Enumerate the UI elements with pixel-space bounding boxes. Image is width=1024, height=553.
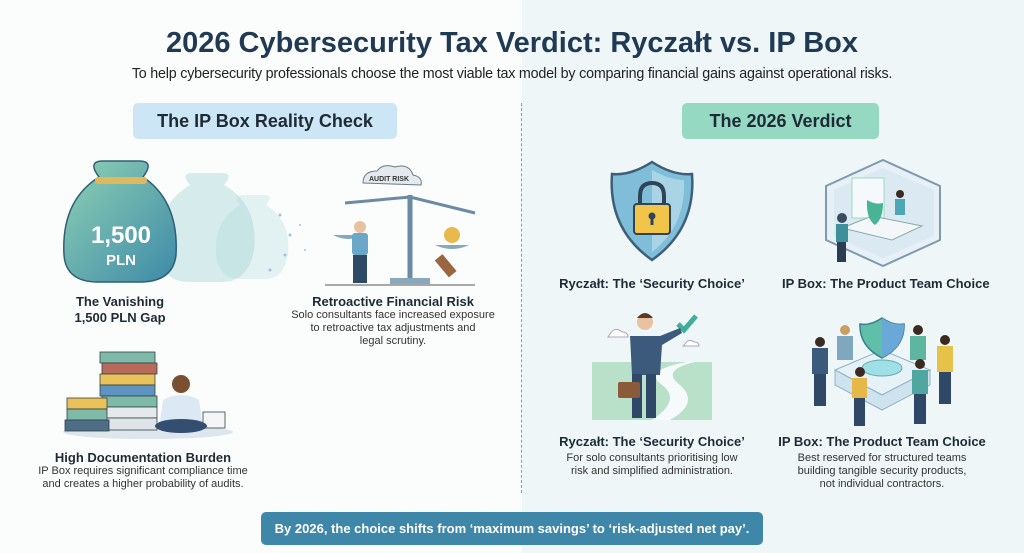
- text: ryczalt security choice: Ryczałt: The ‘Security Choice’: [559, 434, 745, 449]
- text: IP box product team: Best reserved for structured teams: [798, 452, 966, 464]
- text: IP box product team: [778, 434, 986, 490]
- text: IP box product team: building tangible security products,: [798, 465, 966, 477]
- subtitle: To help cybersecurity professionals choose the most viable tax model by comparing financial gains against operational risks.: [132, 66, 892, 82]
- icon: money bags vanishing: PLN: [106, 252, 136, 269]
- icon: businessman with road: [592, 313, 712, 420]
- heading pill: 2026 verdict: [682, 103, 879, 139]
- text: vanishing gap: 1,500 PLN Gap: [74, 310, 166, 325]
- text: vanishing gap: The Vanishing: [76, 294, 164, 309]
- text: IP box product team: not individual contractors.: [820, 478, 944, 490]
- icon: scales audit risk: AUDIT RISK: [369, 176, 409, 183]
- text: retroactive risk: [291, 294, 495, 347]
- heading pill: IP Box reality check: The IP Box Reality Check: [157, 111, 373, 131]
- text: documentation burden: and creates a higher probability of audits.: [42, 478, 244, 490]
- text: retroactive risk: Solo consultants face increased exposure: [291, 309, 495, 321]
- text: ryczalt security choice label: Ryczałt: The ‘Security Choice’: [559, 276, 745, 291]
- text: ryczalt security choice: risk and simplified administration.: [571, 465, 733, 477]
- icon: scales audit risk: [325, 165, 476, 286]
- icon: money bags vanishing: [63, 160, 306, 283]
- text: vanishing gap: [74, 294, 166, 325]
- text: documentation burden: [38, 450, 248, 490]
- bottom banner: By 2026, the choice shifts from ‘maximum savings’ to ‘risk-adjusted net pay’.: [275, 521, 749, 536]
- text: IP box product team: IP Box: The Product Team Choice: [778, 434, 986, 449]
- heading pill: IP Box reality check: [133, 103, 397, 139]
- icon: product team office: [825, 159, 941, 267]
- bottom banner: [261, 512, 763, 545]
- text: retroactive risk: Retroactive Financial Risk: [312, 294, 474, 309]
- text: ryczalt security choice: [559, 434, 745, 477]
- text: ryczalt security choice: For solo consultants prioritising low: [566, 452, 738, 464]
- text: documentation burden: High Documentation Burden: [55, 450, 231, 465]
- heading pill: 2026 verdict: The 2026 Verdict: [709, 111, 852, 131]
- icon: documents pile: [63, 352, 233, 439]
- text: retroactive risk: to retroactive tax adjustments and: [310, 322, 476, 334]
- icon: shield padlock: [610, 160, 694, 262]
- icon: money bags vanishing: 1,500: [91, 222, 151, 249]
- text: IP box product team label: IP Box: The Product Team Choice: [782, 276, 990, 291]
- icon: team around shield platform: [812, 317, 953, 426]
- divider: [521, 103, 522, 493]
- title: 2026 Cybersecurity Tax Verdict: Ryczałt vs. IP Box: [166, 27, 858, 59]
- text: documentation burden: IP Box requires significant compliance time: [38, 465, 248, 477]
- text: retroactive risk: legal scrutiny.: [360, 335, 426, 347]
